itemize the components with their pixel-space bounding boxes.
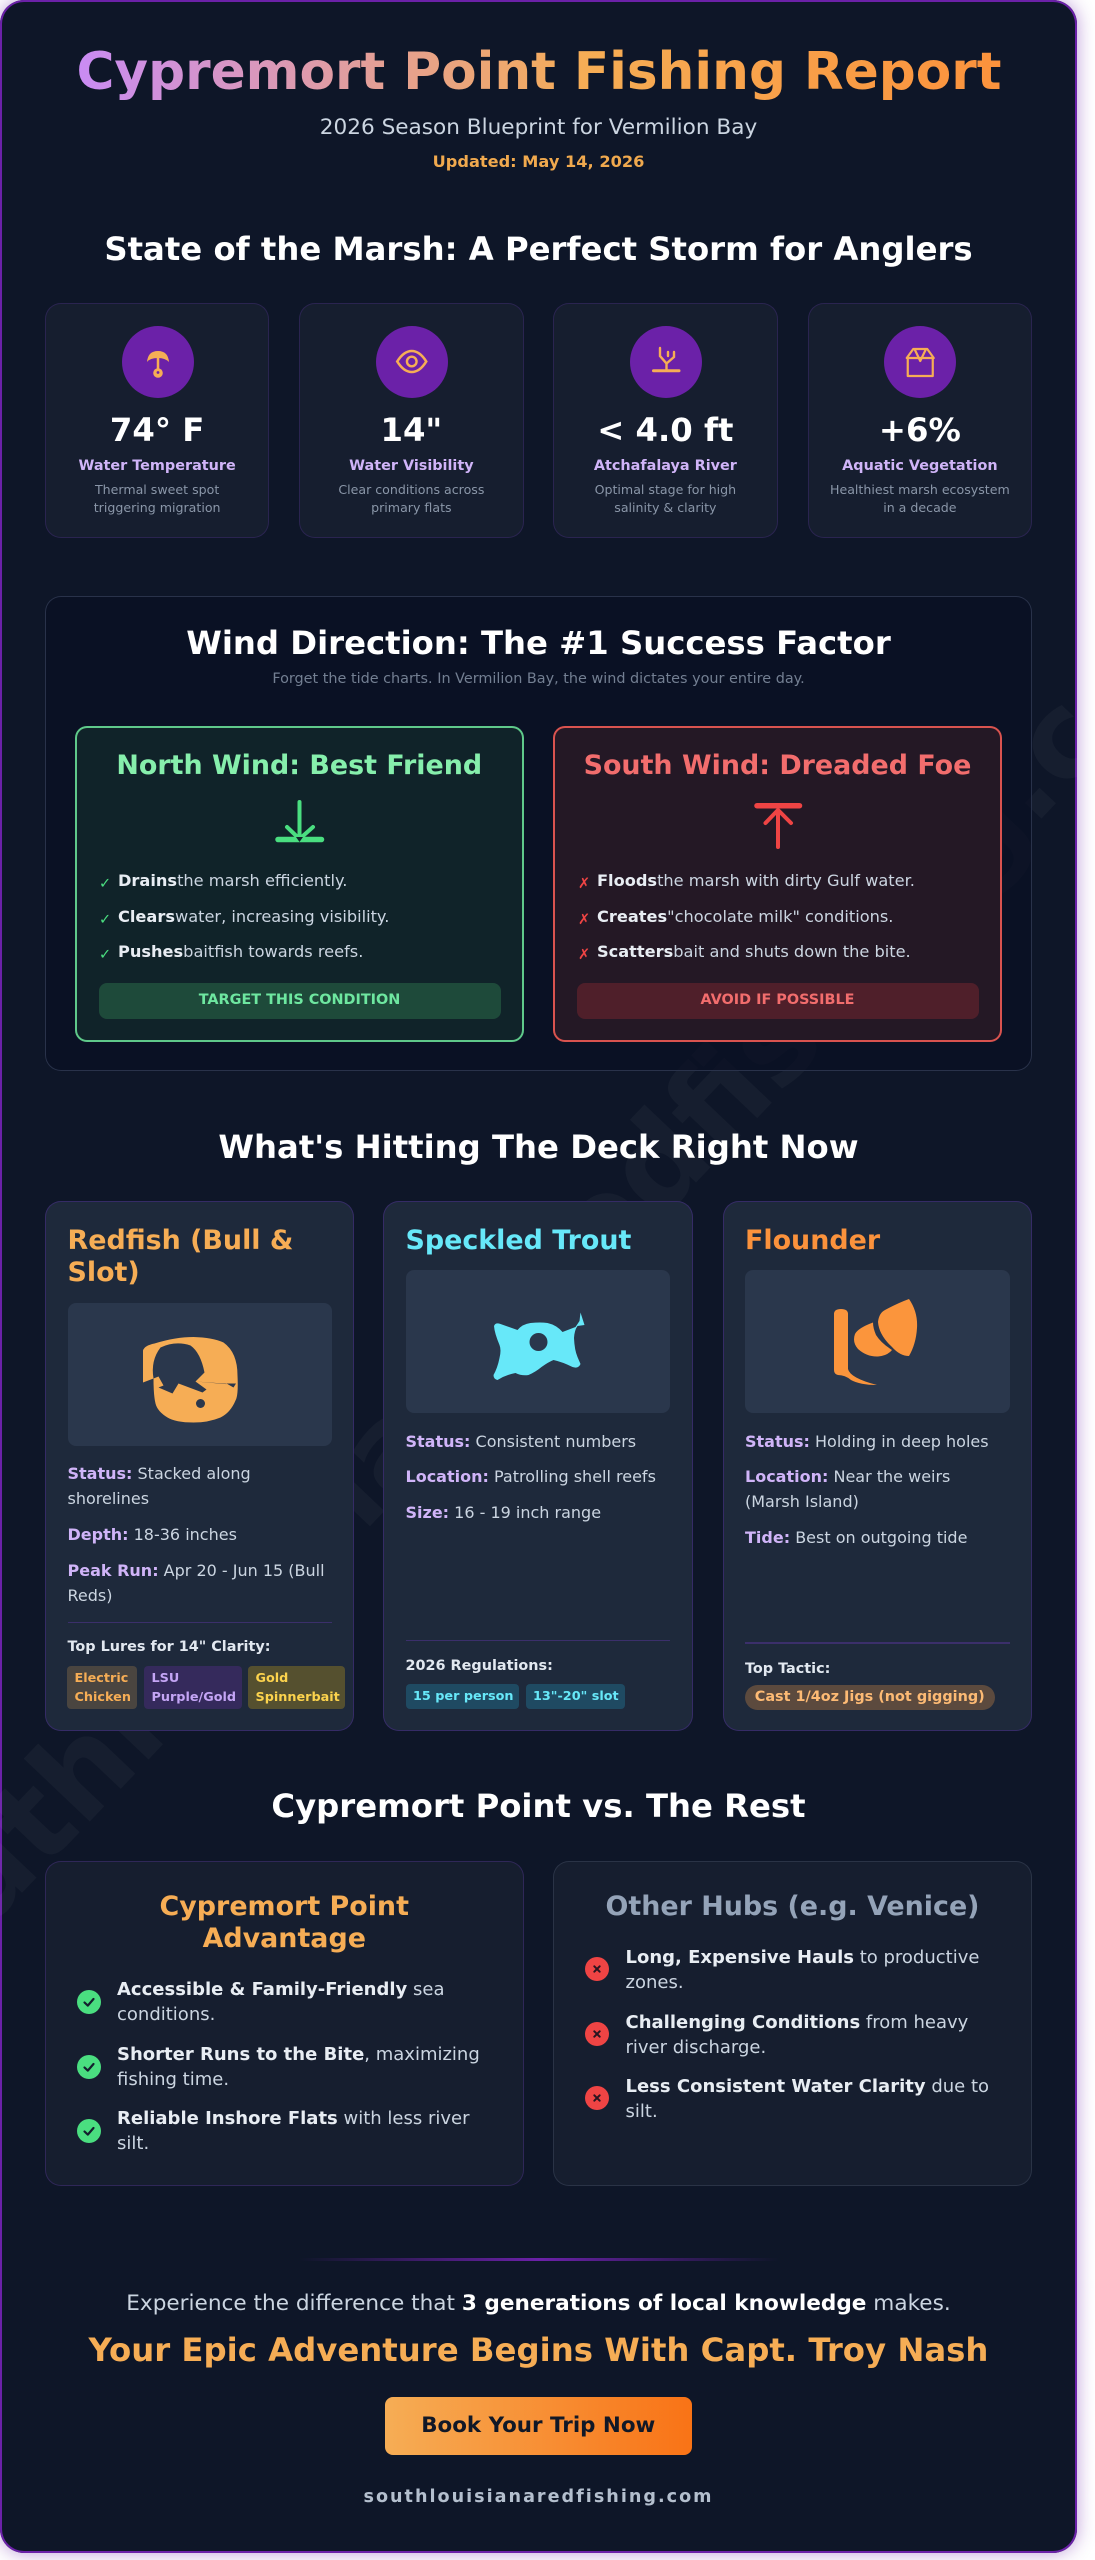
lure chip <box>248 1666 345 1709</box>
panel: other hubs <box>553 1861 1032 2186</box>
lures heading: Top Lures for 14" Clarity: <box>68 1639 270 1655</box>
panel: redfish <box>45 1201 354 1731</box>
list item: ✗ <box>578 947 590 963</box>
icon: check <box>77 2119 101 2143</box>
trout heading: Speckled Trout <box>406 1224 631 1256</box>
tactic pill: Cast 1/4oz Jigs (not gigging) <box>755 1689 985 1705</box>
flounder illustration <box>745 1270 1010 1413</box>
stat label: Aquatic Vegetation <box>842 458 998 474</box>
redfish peak run <box>68 1560 325 1604</box>
panel: speckled trout <box>383 1201 693 1731</box>
stat description <box>338 482 484 515</box>
panel: wind direction <box>45 596 1032 1071</box>
item text <box>117 1979 444 2025</box>
panel: atchafalaya river <box>553 303 778 538</box>
stat description: in a decade <box>883 500 957 515</box>
redfish heading: Redfish (Bull & <box>68 1224 293 1256</box>
updated date: Updated: May 14, 2026 <box>433 152 644 171</box>
avoid badge: AVOID IF POSSIBLE <box>701 992 854 1008</box>
lure chip <box>67 1666 137 1709</box>
advantage item <box>77 2044 480 2090</box>
icon: down arrow <box>275 800 324 842</box>
list item: Drainsthe marsh efficiently. <box>118 871 347 890</box>
drawback item <box>585 2012 968 2058</box>
item text: Accessible & Family-Friendly sea <box>117 1979 444 2000</box>
list item: ✗ <box>578 876 590 892</box>
item text: Challenging Conditions from heavy <box>626 2012 968 2032</box>
drawback item <box>585 2076 989 2122</box>
stat description: Thermal sweet spot <box>95 482 219 497</box>
item text: Less Consistent Water Clarity due to <box>626 2076 989 2097</box>
drawback item <box>585 1947 979 1993</box>
item text <box>626 2074 989 2124</box>
stat value: 14" <box>380 411 442 449</box>
target badge <box>98 983 500 1019</box>
item text: zones. <box>626 1972 684 1993</box>
list item: Creates"chocolate milk" conditions. <box>597 907 893 926</box>
item text <box>626 1947 979 1993</box>
closing line: Experience the difference that 3 generations of local knowledge makes. <box>126 2291 951 2316</box>
stat description: primary flats <box>371 500 452 515</box>
trout location: Location: Patrolling shell reefs <box>406 1466 656 1486</box>
item text <box>626 2012 968 2058</box>
item text: fishing time. <box>117 2068 229 2090</box>
stat label: Water Visibility <box>349 458 474 474</box>
south wind heading: South Wind: Dreaded Foe <box>584 750 971 780</box>
stat label: Atchafalaya River <box>594 458 737 474</box>
list item: Scattersbait and shuts down the bite. <box>597 942 911 961</box>
lure chip: LSU <box>152 1671 179 1686</box>
stat description <box>830 482 1010 515</box>
regulation chip: 13"-20" slot <box>533 1689 619 1704</box>
redfish depth: Depth: 18-36 inches <box>68 1524 237 1544</box>
lure chip: Chicken <box>74 1690 131 1705</box>
stat description: Clear conditions across <box>338 482 484 497</box>
flounder heading: Flounder <box>745 1224 880 1256</box>
redfish peak run: Reds) <box>68 1586 112 1604</box>
heading: versus: Cypremort Point vs. The Rest <box>271 1787 806 1825</box>
heading: wind direction: Wind Direction: The #1 Success Factor <box>186 624 891 662</box>
item text <box>117 2108 470 2154</box>
regulation chip <box>406 1684 518 1709</box>
icon: vegetation box <box>884 326 956 398</box>
icon: cross <box>585 1957 609 1981</box>
redfish peak run: Peak Run: Apr 20 - Jun 15 (Bull <box>68 1560 325 1580</box>
lure chip: Purple/Gold <box>152 1690 236 1705</box>
stat description: Optimal stage for high <box>595 482 736 497</box>
regulation chip: 15 per person <box>413 1689 514 1704</box>
tactic heading: Top Tactic: <box>745 1661 830 1677</box>
regulation chip <box>526 1684 624 1709</box>
panel: aquatic vegetation <box>808 303 1032 538</box>
stat value: < 4.0 ft <box>597 411 734 449</box>
panel: water temperature <box>45 303 269 538</box>
item text: Shorter Runs to the Bite, maximizing <box>117 2044 480 2064</box>
flounder location: Location: Near the weirs <box>745 1466 950 1486</box>
cta button <box>384 2397 692 2455</box>
redfish illustration <box>68 1302 332 1446</box>
panel: water visibility <box>299 303 524 538</box>
list item: ✓ <box>99 876 111 892</box>
lure chip: Gold <box>256 1671 288 1686</box>
title: Cypremort Point Fishing Report <box>76 42 1002 102</box>
cta button: Book Your Trip Now <box>421 2413 655 2438</box>
target badge: TARGET THIS CONDITION <box>199 992 400 1008</box>
panel: flounder <box>722 1201 1032 1731</box>
stat description: triggering migration <box>94 500 221 515</box>
advantage heading: Advantage <box>203 1923 366 1954</box>
icon: cross <box>585 2022 609 2046</box>
advantage heading <box>160 1891 409 1954</box>
advantage item <box>77 1979 444 2025</box>
redfish heading: Slot) <box>68 1256 140 1288</box>
flounder status: Status: Holding in deep holes <box>745 1432 989 1450</box>
lure chip: Spinnerbait <box>256 1690 340 1705</box>
north wind heading: North Wind: Best Friend <box>116 750 482 780</box>
item text: Long, Expensive Hauls to productive <box>626 1947 979 1968</box>
list item: ✗ <box>578 912 590 928</box>
redfish details: shorelines <box>68 1488 149 1508</box>
item text: silt. <box>117 2133 149 2154</box>
icon: eye <box>376 326 448 398</box>
list item: ✓ <box>99 912 111 928</box>
flounder location: (Marsh Island) <box>745 1492 859 1510</box>
icon: check <box>77 2055 101 2079</box>
stat description <box>595 482 736 515</box>
list item: Clearswater, increasing visibility. <box>118 907 389 926</box>
icon: thermometer <box>122 326 194 398</box>
icon: check <box>77 1990 101 2014</box>
list item: ✓ <box>99 947 111 963</box>
subtitle: 2026 Season Blueprint for Vermilion Bay <box>320 115 757 140</box>
stat description: Healthiest marsh ecosystem <box>830 482 1010 497</box>
stat description <box>94 482 221 515</box>
lure chip: Electric <box>74 1671 128 1686</box>
wind subtitle: Forget the tide charts. In Vermilion Bay, the wind dictates your entire day. <box>272 670 805 686</box>
avoid badge <box>576 983 978 1019</box>
trout size: Size: 16 - 19 inch range <box>406 1502 601 1522</box>
list item: Pushesbaitfish towards reefs. <box>118 942 363 961</box>
flounder location <box>745 1466 950 1510</box>
item text: silt. <box>626 2101 658 2122</box>
item text: conditions. <box>117 2004 215 2025</box>
icon: river stage <box>630 326 702 398</box>
item text: river discharge. <box>626 2036 766 2058</box>
heading: state of the marsh: State of the Marsh: A Perfect Storm for Anglers <box>104 230 973 268</box>
advantage heading: Cypremort Point <box>160 1891 409 1922</box>
trout status: Status: Consistent numbers <box>406 1432 636 1450</box>
icon: up arrow <box>754 803 802 849</box>
trout illustration <box>406 1270 670 1413</box>
advantage item <box>77 2108 470 2154</box>
icon: cross <box>585 2086 609 2110</box>
redfish details: Status: Stacked along <box>68 1464 251 1482</box>
panel: north wind <box>75 726 524 1042</box>
item text: Reliable Inshore Flats with less river <box>117 2108 470 2129</box>
panel: south wind <box>553 726 1002 1042</box>
stat label: Water Temperature <box>78 458 236 474</box>
stat value: 74° F <box>110 411 204 449</box>
stat description: salinity & clarity <box>614 500 716 515</box>
regulations heading: 2026 Regulations: <box>406 1658 553 1674</box>
lure chip <box>144 1666 242 1709</box>
stat value: +6% <box>879 411 961 449</box>
other hubs heading: Other Hubs (e.g. Venice) <box>606 1891 979 1922</box>
website url: southlouisianaredfishing.com <box>363 2487 714 2507</box>
flounder tide: Tide: Best on outgoing tide <box>745 1528 967 1546</box>
item text <box>117 2044 480 2090</box>
panel: cypremort advantage <box>45 1861 524 2186</box>
redfish heading <box>68 1224 293 1288</box>
redfish details <box>68 1464 251 1508</box>
list item: Floodsthe marsh with dirty Gulf water. <box>597 871 915 890</box>
closing headline: Your Epic Adventure Begins With Capt. Troy Nash <box>89 2331 988 2369</box>
tactic pill <box>745 1685 994 1710</box>
heading: what's hitting: What's Hitting The Deck Right Now <box>218 1128 859 1166</box>
